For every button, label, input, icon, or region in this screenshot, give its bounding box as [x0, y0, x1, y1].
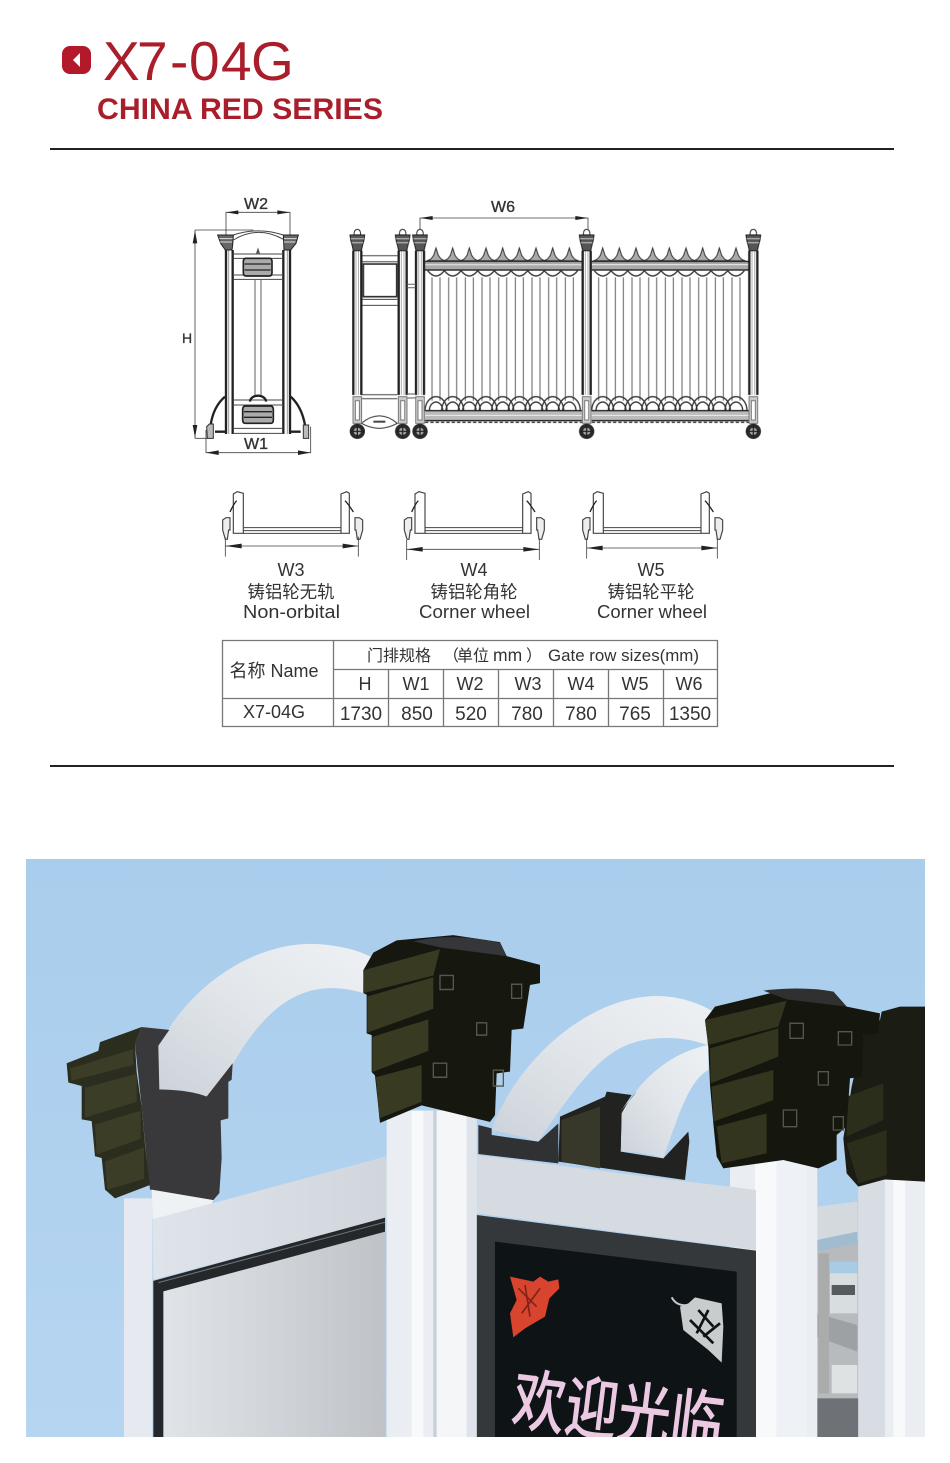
table size header: 门排规格	[367, 647, 431, 665]
caption: W4 Corner wheel: Corner wheel	[419, 602, 530, 622]
right capital	[705, 989, 880, 1168]
label: H: H	[182, 330, 192, 346]
table data row: 1730	[340, 704, 382, 725]
caption: W5 Corner wheel	[597, 560, 707, 622]
W6 dimension	[420, 216, 588, 229]
table column headers: W4	[568, 674, 594, 694]
subtitle: series name: CHINA RED SERIES	[97, 93, 383, 126]
caption: W4 Corner wheel: 铸铝轮角轮	[431, 582, 517, 602]
table data row: 520	[455, 704, 487, 725]
table size header: Gate row sizes(mm)	[548, 646, 699, 665]
panel dark frame	[153, 1218, 385, 1437]
sign black glass	[495, 1242, 737, 1440]
plate under second arch	[478, 1123, 558, 1163]
table data row: 780	[511, 704, 543, 725]
table column headers: W6	[676, 674, 702, 694]
table size header	[367, 645, 699, 665]
lower divider	[50, 765, 894, 767]
table column headers: W2	[456, 674, 484, 694]
left capital stepped face	[67, 1027, 150, 1198]
table column headers: W1	[402, 674, 430, 694]
table column headers	[358, 674, 702, 694]
plan view: W4	[404, 492, 544, 560]
centre capital	[363, 935, 540, 1123]
caption: W5 Corner wheel: W5	[638, 560, 664, 580]
table size header: ）	[526, 647, 542, 665]
caption: W4 Corner wheel: W4	[460, 560, 488, 580]
far right post	[858, 1180, 925, 1440]
photo: gate top close-up	[26, 859, 925, 1463]
heading icon: red rounded back arrow	[62, 46, 91, 74]
table data row: 1350	[669, 704, 711, 725]
rear plate and capital	[558, 1092, 689, 1180]
caption: W3 Non-orbital	[243, 560, 340, 622]
title: model number: X7-04G	[103, 30, 294, 92]
right rail	[477, 1155, 756, 1250]
red ornament	[510, 1277, 559, 1337]
caption: W5 Corner wheel: Corner wheel	[597, 602, 707, 622]
table column headers: W3	[514, 674, 542, 694]
front elevation drawing of folding gate	[350, 216, 761, 439]
centre post	[387, 1111, 477, 1463]
sloped top rail	[153, 1156, 387, 1280]
sign frame	[477, 1215, 756, 1440]
table data row: 780	[565, 704, 597, 725]
left arch	[158, 944, 373, 1097]
table data row: X7-04G	[243, 702, 305, 722]
second arch	[492, 996, 713, 1142]
far right capital	[843, 1007, 925, 1187]
back building view	[817, 1202, 858, 1440]
table name header: 名称 Name	[229, 661, 319, 681]
table column headers: H	[358, 674, 372, 694]
caption: W3 Non-orbital: Non-orbital	[243, 602, 340, 622]
post side face	[152, 1190, 213, 1219]
left half of gate	[67, 935, 540, 1463]
caption: W5 Corner wheel: 铸铝轮平轮	[608, 582, 694, 602]
caption: W3 Non-orbital: W3	[278, 560, 304, 580]
table size header: （	[443, 647, 459, 665]
mirror panel	[164, 1232, 386, 1437]
table grid	[222, 640, 718, 727]
sky background	[26, 859, 925, 1437]
table size header: mm	[493, 645, 522, 665]
left capital back plate	[135, 1027, 233, 1200]
table data row: 850	[401, 704, 433, 725]
label: W6: W6	[491, 199, 515, 216]
caption: W4 Corner wheel	[419, 560, 530, 622]
table data row: 765	[619, 704, 651, 725]
plan view: W3	[223, 492, 363, 557]
left post	[124, 1198, 152, 1463]
table column headers: W5	[622, 674, 648, 694]
right half of gate	[477, 989, 925, 1440]
top divider	[50, 148, 894, 150]
third arch front	[620, 1092, 637, 1152]
table size header: 单位	[457, 647, 489, 665]
label: W2: W2	[244, 196, 268, 213]
side elevation drawing with H W1 W2 dimensions	[193, 210, 311, 455]
table data row	[243, 702, 711, 725]
sign cabinet	[361, 256, 397, 428]
right post	[730, 1160, 817, 1440]
label: W1: W1	[244, 436, 268, 453]
caption: W3 Non-orbital: 铸铝轮无轨	[248, 582, 334, 602]
plan view: W5	[583, 492, 723, 559]
specification table	[222, 640, 718, 727]
third arch	[620, 1045, 708, 1158]
white ornament	[672, 1297, 723, 1363]
